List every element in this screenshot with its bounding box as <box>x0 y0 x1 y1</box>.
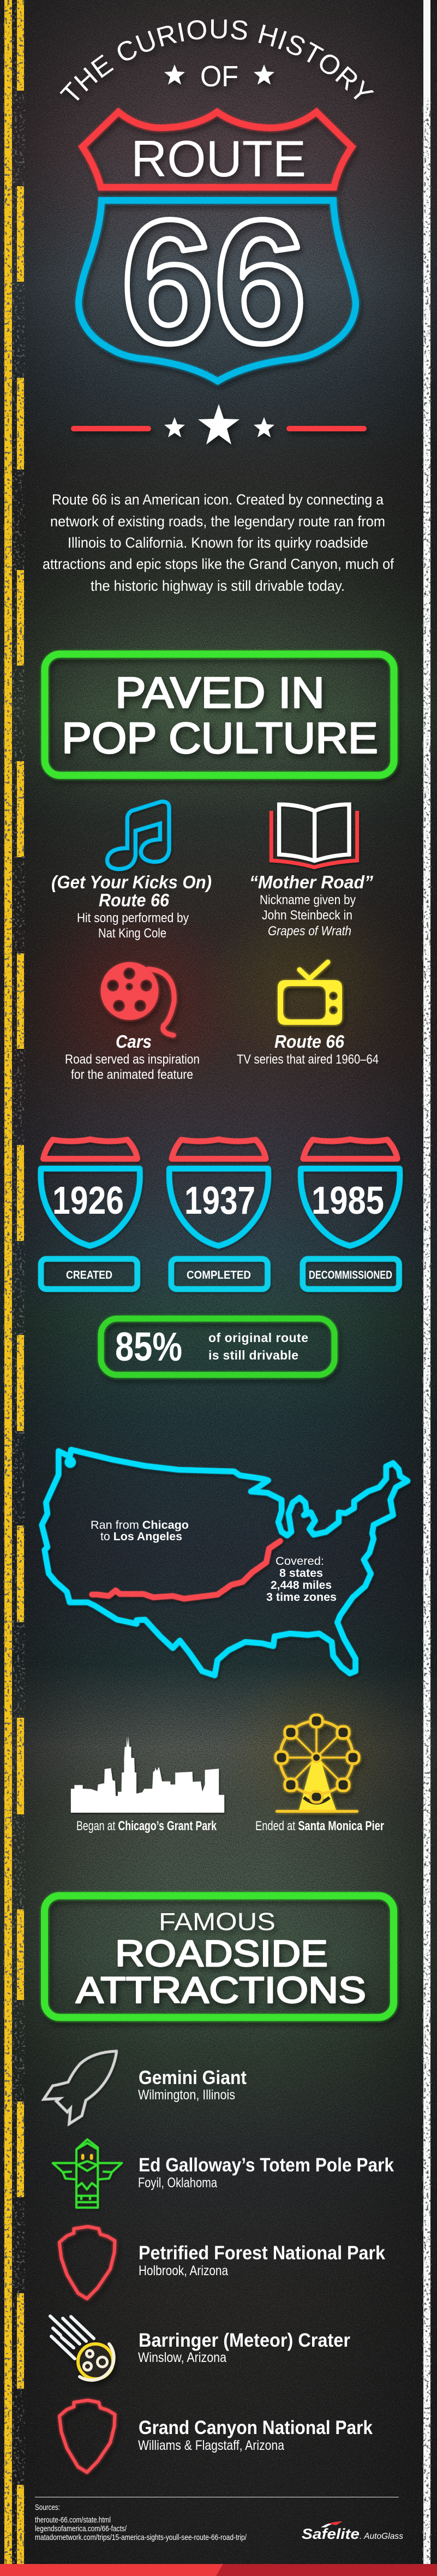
attraction: petrified forest <box>59 2227 385 2299</box>
attraction: gemini giant: Gemini Giant <box>139 2067 247 2088</box>
heading text: ATTRACTIONS <box>76 1969 366 2011</box>
white road line <box>422 0 432 2564</box>
timeline: 1926 created: 1926 <box>52 1179 124 1222</box>
number 66: 66 <box>121 184 307 380</box>
item: cars: Road served as inspiration <box>65 1052 200 1067</box>
star divider <box>71 404 367 444</box>
item: mother road: John Steinbeck in <box>262 908 352 923</box>
start: chicago skyline <box>71 1736 224 1833</box>
title arc: THE CURIOUS HISTORY <box>60 20 374 103</box>
item: song: (Get Your Kicks On) <box>51 872 212 892</box>
heading text: FAMOUS <box>159 1908 276 1936</box>
logo: safelite autoglass: . AutoGlass <box>360 2532 403 2541</box>
item: song: Nat King Cole <box>98 926 166 941</box>
us outline <box>42 1450 408 1675</box>
heading panel: paved in pop culture <box>45 654 394 775</box>
map label: endpoints <box>91 1519 189 1543</box>
start: chicago skyline: Began at Chicago’s Grant Park <box>76 1819 217 1833</box>
item: song: Route 66 <box>99 890 170 910</box>
item: tv series: Route 66 <box>274 1031 345 1052</box>
logo: safelite autoglass <box>302 2521 403 2542</box>
map label: endpoints: Ran from Chicago <box>91 1519 189 1532</box>
timeline: 1985 decommissioned <box>301 1139 400 1289</box>
intro text: the historic highway is still drivable today. <box>91 578 345 594</box>
intro text: attractions and epic stops like the Grand Canyon, much of <box>43 556 394 572</box>
attraction: petrified forest: Petrified Forest National Park <box>139 2242 385 2264</box>
map label: stats: Covered: <box>276 1555 324 1568</box>
map label: stats <box>266 1555 337 1604</box>
attraction: barringer crater <box>50 2316 350 2380</box>
intro text: Illinois to California. Known for its quirky roadside <box>68 535 368 551</box>
timeline: 1937 completed: 1937 <box>184 1179 255 1222</box>
callout: 85 percent <box>101 1319 334 1375</box>
route 66 shield <box>79 112 356 381</box>
sources <box>35 2503 247 2542</box>
icon: rocket <box>44 2051 116 2124</box>
icon: open book <box>271 804 357 867</box>
icon: television <box>278 962 342 1025</box>
timeline: 1926 created <box>41 1139 140 1289</box>
heading text: ROADSIDE <box>115 1933 328 1974</box>
item: tv series: TV series that aired 1960–64 <box>237 1052 379 1067</box>
timeline: 1985 decommissioned: DECOMMISSIONED <box>309 1269 392 1281</box>
logo: safelite autoglass: Safelite <box>302 2526 360 2542</box>
map label: endpoints: to Los Angeles <box>100 1530 182 1543</box>
end: santa monica pier: Ended at Santa Monica Pier <box>255 1819 384 1833</box>
timeline: 1937 completed: COMPLETED <box>187 1269 251 1281</box>
attraction: totem pole park: Foyil, Oklahoma <box>138 2175 217 2191</box>
shield top red <box>82 112 352 187</box>
map label: stats: 3 time zones <box>266 1591 337 1604</box>
icon: film reel <box>101 962 174 1035</box>
yellow road lines <box>3 0 25 2564</box>
map label: stats: 2,448 miles <box>271 1579 332 1592</box>
heading text <box>76 1908 366 2011</box>
ROUTE label: ROUTE <box>131 130 306 187</box>
icon: totem pole <box>53 2139 122 2207</box>
heading text <box>62 668 378 762</box>
icon: music note <box>107 802 169 869</box>
attraction: barringer crater: Barringer (Meteor) Crater <box>139 2330 350 2351</box>
heading panel: famous roadside attractions <box>45 1896 394 2017</box>
icon: arrowhead <box>59 2227 115 2299</box>
map label: stats: 8 states <box>279 1567 323 1580</box>
intro text: Route 66 is an American icon. Created by connecting a <box>52 491 384 508</box>
attraction: gemini giant <box>44 2051 247 2124</box>
callout: 85 percent: of original route <box>208 1331 308 1345</box>
item: cars: for the animated feature <box>71 1067 193 1082</box>
intro text: network of existing roads, the legendary route ran from <box>50 513 385 530</box>
icon: arrowhead <box>59 2400 115 2472</box>
heading text: PAVED IN <box>115 668 325 717</box>
timeline: 1926 created: CREATED <box>66 1269 112 1281</box>
map: united states with route <box>42 1450 408 1675</box>
timeline: 1937 completed <box>169 1139 268 1289</box>
callout: 85 percent: 85% <box>115 1324 182 1369</box>
bottom bar <box>0 2564 437 2576</box>
route line <box>92 1541 280 1599</box>
star and OF line <box>164 60 274 93</box>
icon: interstate shield <box>169 1139 268 1289</box>
attraction: grand canyon: Grand Canyon National Park <box>139 2417 373 2438</box>
timeline: 1985 decommissioned: 1985 <box>312 1179 384 1222</box>
attraction: petrified forest: Holbrook, Arizona <box>139 2263 228 2278</box>
icon: ferris wheel <box>276 1715 359 1813</box>
attraction: grand canyon <box>59 2400 373 2472</box>
icon: interstate shield <box>301 1139 400 1289</box>
item: mother road: Nickname given by <box>260 893 356 907</box>
item: cars <box>65 962 200 1082</box>
icon: skyline <box>71 1736 224 1813</box>
item: mother road: “Mother Road” <box>249 872 373 892</box>
item: song: Hit song performed by <box>77 911 189 925</box>
sources: legendsofamerica.com/66-facts/ <box>35 2524 127 2533</box>
item: cars: Cars <box>116 1031 152 1052</box>
attraction: totem pole park: Ed Galloway’s Totem Pole Park <box>139 2154 394 2176</box>
star and OF line: OF <box>200 60 238 93</box>
icon: interstate shield <box>41 1139 140 1289</box>
sources: theroute-66.com/state.html <box>35 2515 111 2525</box>
shield bottom blue <box>79 200 356 381</box>
icon: meteor <box>50 2316 114 2380</box>
item: mother road: Grapes of Wrath <box>268 924 351 939</box>
attraction: totem pole park <box>53 2139 394 2207</box>
item: song <box>51 802 212 941</box>
sources: matadornetwork.com/trips/15-america-sights-youll-see-route-66-road-trip/ <box>35 2533 247 2542</box>
item: tv series <box>237 962 379 1067</box>
attraction: barringer crater: Winslow, Arizona <box>138 2350 226 2365</box>
end: santa monica pier <box>255 1715 384 1833</box>
intro text <box>43 491 394 594</box>
sources: Sources: <box>35 2503 60 2512</box>
item: mother road <box>249 804 373 939</box>
attraction: gemini giant: Wilmington, Illinois <box>138 2087 235 2103</box>
attraction: grand canyon: Williams & Flagstaff, Arizona <box>138 2438 284 2453</box>
heading text: POP CULTURE <box>62 714 378 762</box>
callout: 85 percent: is still drivable <box>208 1348 298 1362</box>
